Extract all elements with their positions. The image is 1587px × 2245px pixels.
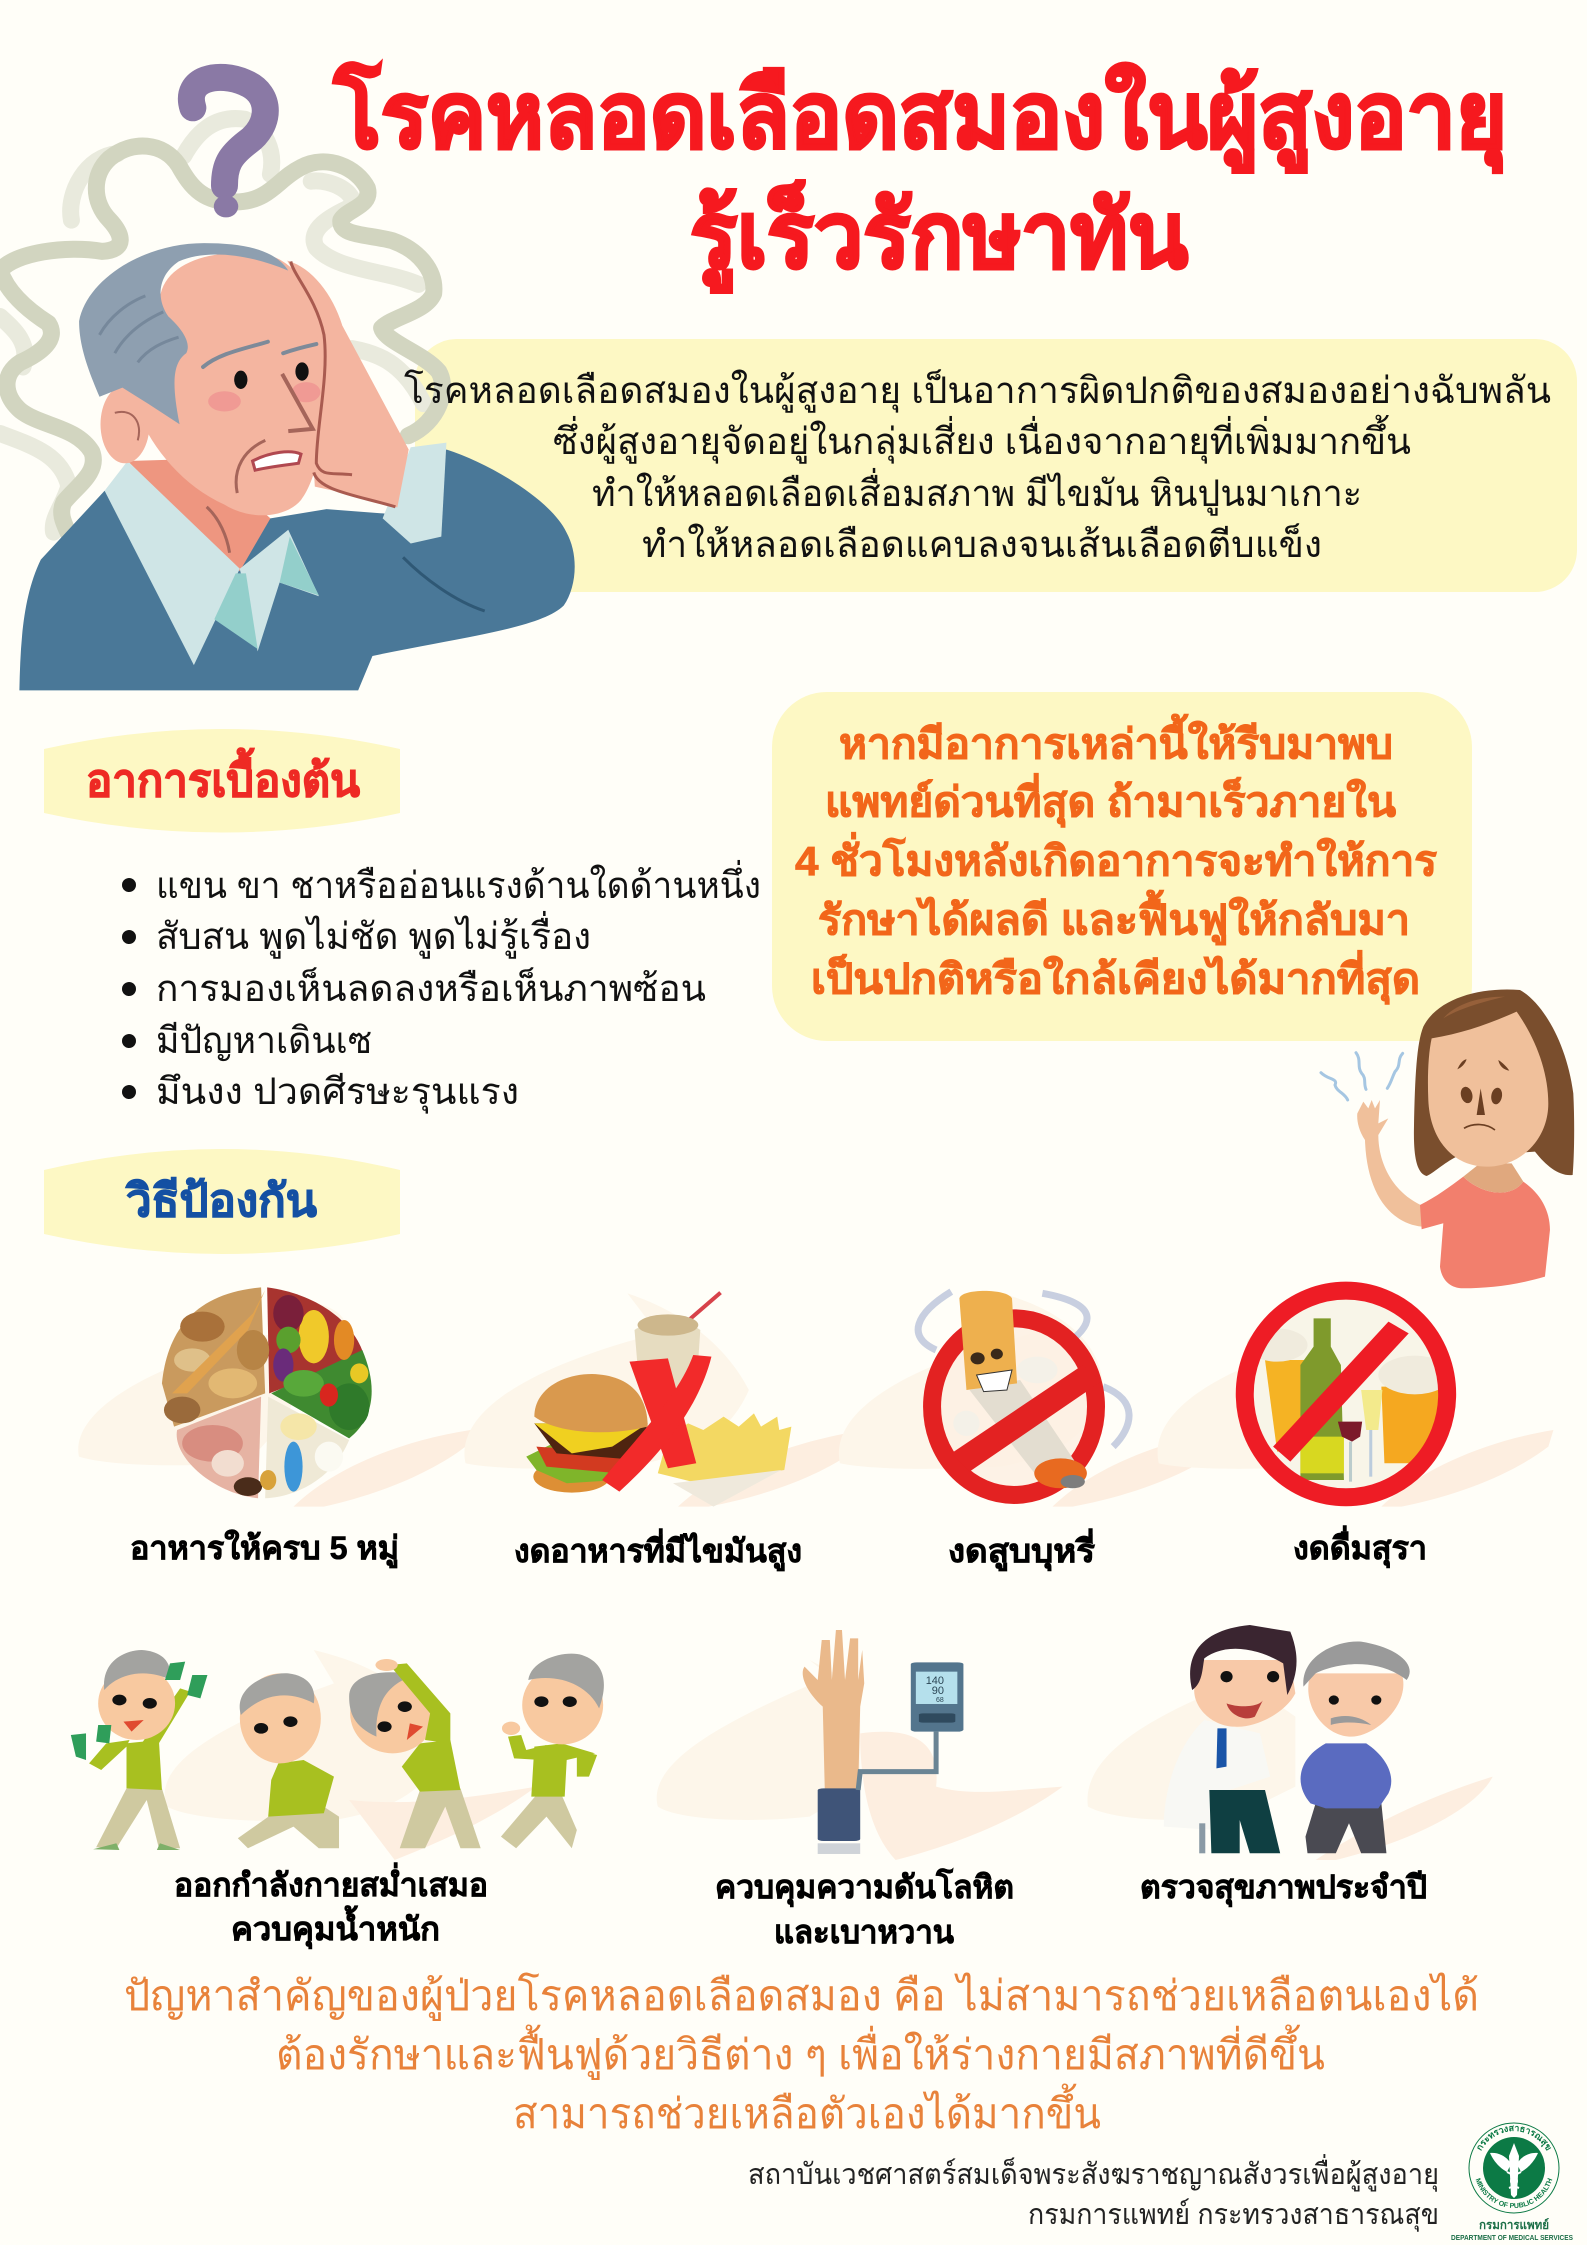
hand on head <box>288 261 408 507</box>
icon: smoke squiggle <box>0 119 443 534</box>
illustration: worried elderly man <box>0 77 575 690</box>
cigarette face <box>971 1352 985 1364</box>
icon: ministry of public health logo: MINISTRY OF PUBLIC HEALTH <box>1476 2178 1552 2208</box>
icon: elderly exercising <box>71 1650 604 1850</box>
text block: closing message <box>124 1971 1479 2137</box>
text block: source institution: สถาบันเวชศาสตร์สมเด็จพระสังฆราชญาณสังวรเพื่อผู้สูงอายุ <box>748 2154 1439 2192</box>
red cross <box>629 1358 696 1468</box>
cigarette <box>969 1380 1083 1483</box>
icon: blood pressure monitor: 90 <box>932 1685 944 1697</box>
list: symptoms: แขน ขา ชาหรืออ่อนแรงด้านใดด้านหนึ่ง <box>156 859 761 906</box>
cuff <box>818 1788 860 1841</box>
callout text <box>795 714 1437 1005</box>
text block: closing message: ต้องรักษาและฟื้นฟูด้วยวิธีต่าง ๆ เพื่อให้ร่างกายมีสภาพที่ดีขึ้น <box>276 2024 1325 2080</box>
heading: prevention <box>44 1149 400 1254</box>
beer left <box>1265 1360 1305 1452</box>
monitor <box>911 1662 963 1732</box>
callout background <box>772 692 1472 1041</box>
text block: introduction <box>404 367 1551 565</box>
icon: no smoking <box>918 1291 1129 1495</box>
labels: prevention tips 1: งดอาหารที่มีไขมันสูง <box>514 1528 802 1572</box>
icon: blood pressure monitor: 68 <box>936 1697 944 1704</box>
tube <box>858 1732 936 1790</box>
labels: prevention tips 2: และเบาหวาน <box>774 1914 954 1950</box>
icon: no fatty food <box>526 1293 791 1507</box>
collar <box>105 461 240 665</box>
figure 1 <box>71 1650 207 1850</box>
figure 3 <box>349 1659 481 1848</box>
brush splash backgrounds <box>78 1293 1553 1507</box>
callout text: 4 ชั่วโมงหลังเกิดอาการจะทำให้การ <box>795 832 1437 884</box>
title line 2: รู้เร็วรักษาทัน <box>690 180 1188 293</box>
brush splash backgrounds <box>165 1650 1493 1860</box>
icon: ministry of public health logo: กระทรวงสาธารณสุข <box>1477 2125 1552 2151</box>
labels: prevention tips 2: ตรวจสุขภาพประจำปี <box>1140 1869 1427 1908</box>
callout text: แพทย์ด่วนที่สุด ถ้ามาเร็วภายใน <box>825 773 1396 828</box>
text block: closing message: สามารถช่วยเหลือตัวเองได้มากขึ้น <box>513 2083 1101 2137</box>
milkshake <box>683 1293 721 1325</box>
callout: see a doctor quickly <box>772 692 1472 1041</box>
doctor body <box>1164 1720 1270 1830</box>
labels: prevention tips 2: ออกกำลังกายสม่ำเสมอ <box>174 1862 488 1903</box>
prohibition ring <box>932 1318 1096 1495</box>
neck <box>128 459 270 571</box>
row: prevention tips 2 icons <box>71 1625 1493 1860</box>
sweater <box>19 450 575 690</box>
list: symptoms: มึนงง ปวดศีรษะรุนแรง <box>156 1071 519 1114</box>
labels: prevention tips 2: ควบคุมความดันโลหิต <box>715 1868 1014 1908</box>
wine glasses <box>1338 1422 1362 1442</box>
labels: prevention tips 1: อาหารให้ครบ 5 หมู่ <box>130 1529 399 1569</box>
sleeve cuff <box>383 443 446 544</box>
fries <box>658 1413 791 1483</box>
hair <box>79 243 288 424</box>
list: symptoms: สับสน พูดไม่ชัด พูดไม่รู้เรื่อง <box>156 910 591 959</box>
text block: introduction: ทำให้หลอดเลือดเสื่อมสภาพ มีไขมัน หินปูนมาเกาะ <box>592 467 1362 516</box>
labels: prevention tips 2 <box>174 1862 1427 1950</box>
panel: intro background <box>415 339 1577 592</box>
icon: five food groups <box>162 1287 372 1498</box>
heading: early symptoms <box>44 729 400 832</box>
figure 2 <box>238 1673 339 1848</box>
icon: doctor and patient <box>1164 1625 1410 1853</box>
text block: introduction: ซึ่งผู้สูงอายุจัดอยู่ในกลุ่มเสี่ยง เนื่องจากอายุที่เพิ่มมากขึ้น <box>553 414 1411 464</box>
icon: ministry of public health logo: กรมการแพทย์ <box>1479 2218 1549 2232</box>
numbness squiggles <box>1321 1053 1403 1100</box>
bottle <box>1300 1318 1344 1480</box>
face details <box>208 391 241 411</box>
text block: closing message: ปัญหาสำคัญของผู้ป่วยโรคหลอดเลือดสมอง คือ ไม่สามารถช่วยเหลือตนเองได้ <box>124 1971 1479 2021</box>
prohibition bar <box>951 1365 1101 1472</box>
row: prevention tips 1 icons <box>78 1287 1553 1507</box>
labels: prevention tips 1: งดสูบบุหรี่ <box>948 1528 1095 1572</box>
arm and hand <box>803 1630 864 1790</box>
list: symptoms: การมองเห็นลดลงหรือเห็นภาพซ้อน <box>156 965 706 1009</box>
neck <box>1463 1163 1523 1193</box>
face <box>1428 1012 1548 1167</box>
text block: introduction: โรคหลอดเลือดสมองในผู้สูงอายุ เป็นอาการผิดปกติของสมองอย่างฉับพลัน <box>404 367 1551 413</box>
patient head <box>1308 1673 1403 1737</box>
text block: introduction: ทำให้หลอดเลือดแคบลงจนเส้นเลือดตีบแข็ง <box>642 521 1322 565</box>
icon: blood pressure monitor: 140 <box>926 1675 944 1687</box>
title line 1: โรคหลอดเลือดสมองในผู้สูงอายุ <box>333 62 1507 173</box>
figure 4 <box>501 1654 604 1848</box>
callout text: รักษาได้ผลดี และฟื้นฟูให้กลับมา <box>818 890 1410 946</box>
text block: source institution <box>748 2154 1439 2232</box>
shirt <box>1420 1177 1550 1288</box>
icon: no alcohol <box>1245 1290 1451 1497</box>
callout text: เป็นปกติหรือใกล้เคียงได้มากที่สุด <box>811 950 1420 1005</box>
burger <box>533 1461 610 1493</box>
illustration: woman with numb hand <box>1321 989 1574 1288</box>
labels: prevention tips 2: ควบคุมน้ำหนัก <box>231 1905 440 1950</box>
head <box>101 385 149 463</box>
prohibition ring <box>1245 1291 1447 1497</box>
title <box>333 62 1507 293</box>
callout text: หากมีอาการเหล่านี้ให้รีบมาพบ <box>839 714 1393 767</box>
icon: question mark <box>191 77 265 217</box>
heading: prevention: วิธีป้องกัน <box>125 1175 317 1226</box>
text block: source institution: กรมการแพทย์ กระทรวงสาธารณสุข <box>1028 2198 1439 2232</box>
labels: prevention tips 1: งดดื่มสุรา <box>1293 1525 1427 1569</box>
heading: early symptoms: อาการเบื้องต้น <box>86 747 360 806</box>
icon: ministry of public health logo <box>1451 2122 1573 2242</box>
beer right <box>1381 1387 1445 1463</box>
patient body <box>1305 1803 1386 1853</box>
list: symptoms: มีปัญหาเดินเซ <box>156 1020 372 1062</box>
doctor head <box>1194 1660 1295 1727</box>
icon: blood pressure monitor <box>803 1630 963 1854</box>
labels: prevention tips 1 <box>130 1525 1427 1572</box>
hair <box>1414 989 1574 1176</box>
icon: ministry of public health logo: DEPARTMENT OF MEDICAL SERVICES <box>1451 2233 1573 2242</box>
list: symptoms <box>122 859 761 1114</box>
arm <box>1357 1100 1422 1227</box>
